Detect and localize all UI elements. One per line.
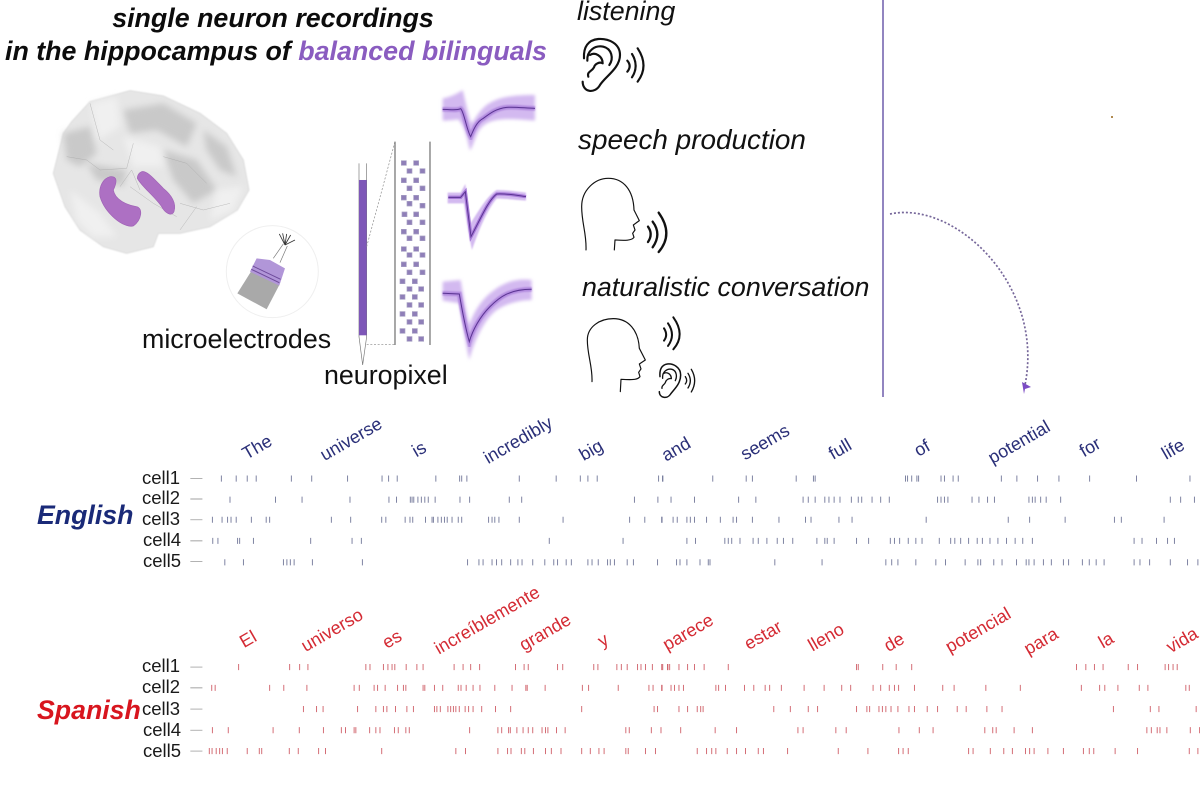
- Spanish sentence words: y: [594, 629, 612, 651]
- Spanish cell labels: cell3: [142, 698, 180, 719]
- Spanish sentence words: parece: [659, 610, 717, 654]
- Spanish cell labels: [142, 655, 181, 761]
- Spanish sentence words: universo: [298, 604, 366, 656]
- Spanish sentence words: para: [1020, 623, 1062, 659]
- English cell labels: cell2: [142, 487, 180, 508]
- waveform 1: [443, 90, 535, 151]
- English cell labels: cell1: [142, 467, 180, 488]
- English sentence words: is: [408, 437, 430, 461]
- English sentence words: The: [239, 431, 275, 463]
- Spanish sentence words: El: [236, 626, 260, 652]
- English sentence words: seems: [737, 420, 793, 464]
- Spanish sentence words: grande: [516, 609, 574, 655]
- English sentence words: life: [1158, 435, 1188, 463]
- icon: speaking head: [582, 178, 666, 252]
- English sentence words: for: [1076, 433, 1104, 461]
- brain illustration: [53, 91, 249, 253]
- electrode contact sites: [400, 161, 425, 341]
- Spanish cell labels: cell5: [143, 740, 181, 761]
- Spanish cell labels: cell1: [142, 655, 180, 676]
- hippocampus right: [137, 171, 175, 214]
- Spanish spike raster: [190, 664, 668, 754]
- vertical divider: [882, 0, 884, 397]
- heading: speech production: speech production: [578, 124, 806, 155]
- Spanish sentence words: [236, 582, 1200, 659]
- Spanish spike raster right half: [662, 664, 1200, 754]
- English sentence words: incredibly: [480, 412, 556, 468]
- English cell labels: cell5: [143, 550, 181, 571]
- English spike raster right half: [662, 476, 1198, 565]
- label: Spanish: Spanish: [37, 695, 141, 725]
- label: microelectrodes: microelectrodes: [142, 324, 331, 354]
- English sentence words: big: [576, 435, 606, 465]
- English cell labels: [142, 467, 181, 571]
- English sentence words: potential: [985, 416, 1053, 468]
- English cell labels: cell3: [142, 508, 180, 529]
- Spanish sentence words: potencial: [942, 603, 1014, 657]
- label: English: English: [37, 500, 133, 530]
- Spanish sentence words: estar: [741, 616, 785, 654]
- icon: head with speech and ear: [587, 317, 695, 397]
- Spanish sentence words: de: [880, 628, 908, 656]
- heading: naturalistic conversation: naturalistic conversation: [582, 272, 869, 302]
- English sentence words: of: [910, 435, 934, 460]
- icon: ear with sound: [583, 39, 643, 91]
- English sentence words: and: [658, 433, 694, 465]
- microelectrode inset: [226, 226, 318, 318]
- Spanish sentence words: lleno: [805, 619, 847, 655]
- Spanish cell labels: cell2: [142, 676, 180, 697]
- arrow: dotted curve to sentences: [890, 212, 1031, 394]
- Spanish sentence words: es: [379, 626, 405, 652]
- Spanish cell labels: cell4: [143, 719, 181, 740]
- waveform 3: [443, 279, 532, 360]
- English cell labels: cell4: [143, 529, 181, 550]
- title: [5, 3, 547, 66]
- English spike raster: [190, 476, 663, 565]
- hippocampus left: [100, 177, 141, 226]
- English sentence words: [239, 412, 1188, 468]
- Spanish sentence words: increíblemente: [431, 582, 543, 658]
- waveform 2: [448, 184, 526, 250]
- title: in the hippocampus of balanced bilinguals: [5, 36, 547, 66]
- English sentence words: full: [825, 435, 855, 463]
- neuropixel probe: [359, 142, 430, 365]
- title: single neuron recordings: [112, 3, 434, 33]
- label: neuropixel: neuropixel: [324, 360, 448, 390]
- English sentence words: universe: [317, 413, 385, 465]
- Spanish sentence words: la: [1095, 627, 1118, 652]
- small stray mark: [1111, 116, 1113, 118]
